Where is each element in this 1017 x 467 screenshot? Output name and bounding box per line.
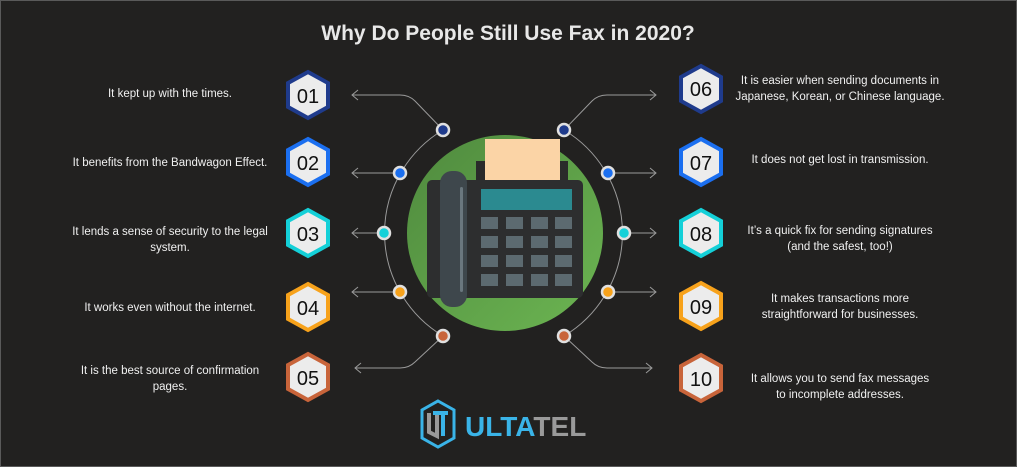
logo: ULTATEL: ULTATEL — [465, 411, 586, 442]
title: Why Do People Still Use Fax in 2020? — [321, 22, 695, 45]
right texts: It does not get lost in transmission. — [751, 154, 929, 166]
dots — [378, 124, 630, 342]
right texts: It’s a quick fix for sending signatures — [747, 225, 933, 237]
hexagons: 01 — [297, 86, 319, 108]
right texts: Japanese, Korean, or Chinese language. — [735, 91, 945, 103]
left texts: It is the best source of confirmation — [81, 365, 259, 377]
left texts: It lends a sense of security to the legal — [72, 226, 268, 238]
hexagons — [288, 66, 721, 401]
hexagons: 10 — [690, 369, 712, 391]
logo: ULTATEL — [422, 401, 586, 447]
hexagons: 05 — [297, 368, 319, 390]
connector arcs — [352, 90, 656, 373]
hexagons: 02 — [297, 153, 319, 175]
right texts — [735, 75, 945, 401]
left texts: system. — [150, 242, 190, 254]
hexagons: 09 — [690, 297, 712, 319]
right texts: It is easier when sending documents in — [741, 75, 939, 87]
hexagons: 06 — [690, 79, 712, 101]
right texts: to incomplete addresses. — [776, 389, 904, 401]
hexagons: 07 — [690, 153, 712, 175]
right texts: It allows you to send fax messages — [751, 373, 929, 385]
hexagons: 03 — [297, 224, 319, 246]
hexagons: 04 — [297, 298, 319, 320]
icon: fax machine — [407, 135, 603, 331]
right texts: straightforward for businesses. — [762, 309, 918, 321]
hexagons: 08 — [690, 224, 712, 246]
left texts: It benefits from the Bandwagon Effect. — [73, 157, 267, 169]
left texts: It works even without the internet. — [84, 302, 256, 314]
right texts: (and the safest, too!) — [787, 241, 893, 253]
left texts — [72, 88, 268, 393]
right texts: It makes transactions more — [771, 293, 909, 305]
left texts: It kept up with the times. — [108, 88, 232, 100]
left texts: pages. — [153, 381, 187, 393]
